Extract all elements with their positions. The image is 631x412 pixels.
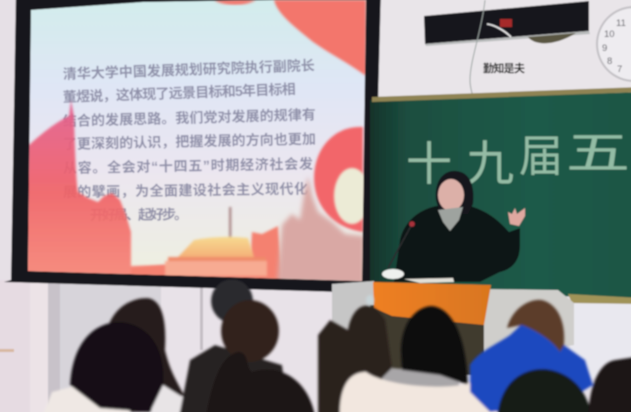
- chalk handwriting: 十: [406, 138, 452, 190]
- speaker striped collar: [438, 207, 463, 231]
- bracket under device: [528, 33, 576, 43]
- student: far right hair: [588, 356, 631, 412]
- student: blue jacket: [470, 322, 593, 412]
- student: black hair centre: [401, 306, 468, 385]
- green chalkboard: [370, 92, 631, 298]
- projector screen frame: [4, 0, 381, 293]
- upper right white wall: [372, 0, 631, 97]
- student: white top shoulder: [150, 380, 184, 412]
- student: white fur hood: [340, 372, 496, 412]
- white cloth on lectern: [382, 269, 404, 279]
- slide body text: 开好局、起好步。: [90, 206, 188, 223]
- student: brown hair long: [100, 298, 184, 412]
- student: white collar far left: [40, 386, 130, 412]
- student: grey collar: [382, 368, 460, 392]
- clock numerals: 9: [602, 43, 607, 54]
- student: bottom right head: [497, 369, 592, 412]
- grey lectern left block: [332, 281, 374, 332]
- right lower wall: [570, 303, 631, 378]
- slide body text: 清华大学中国发展规划研究院执行副院长: [63, 57, 315, 82]
- chalk handwriting: 九: [466, 138, 514, 191]
- chalk handwriting: 五: [566, 129, 630, 178]
- papers on lectern: [404, 278, 454, 283]
- hanging cable: [470, 0, 485, 133]
- student: dark coat center: [178, 345, 290, 412]
- audience: [40, 279, 631, 412]
- chalk handwriting: [406, 129, 630, 191]
- statue group: [277, 176, 364, 285]
- wall clock: [596, 6, 631, 82]
- white cable: [487, 24, 511, 37]
- student: back head top: [211, 279, 253, 323]
- red small arc top: [214, 0, 256, 5]
- microphone: [388, 221, 415, 268]
- dark lectern base: [370, 305, 488, 375]
- student: black hair far left: [70, 322, 163, 412]
- grey lectern right block: [484, 289, 574, 360]
- white circle in ring: [334, 168, 370, 224]
- projected slide: [20, 0, 370, 285]
- calligraphy plaque text: 勤知是夫: [483, 61, 525, 75]
- slide body text: 了更深刻的认识，把握发展的方向也更加: [63, 131, 316, 152]
- orange lectern top: [373, 282, 491, 325]
- speaker: [394, 171, 525, 282]
- clock numerals: 10: [604, 29, 615, 40]
- wall device: black display bar: [424, 1, 590, 46]
- chalk handwriting: 届: [519, 132, 563, 181]
- white hair clip: [366, 295, 374, 305]
- clock numerals: 8: [607, 56, 612, 67]
- student: ponytail front: [205, 352, 316, 412]
- red ring right: [314, 127, 363, 232]
- slide body text: 展的擘画，为全面建设社会主义现代化: [63, 181, 308, 200]
- red skyline strip: [131, 226, 282, 282]
- Tiananmen tower: [165, 207, 267, 276]
- speaker hair: [436, 171, 473, 214]
- student: brown hair right: [507, 300, 564, 352]
- speaker jacket: [394, 206, 520, 282]
- red digital readout: [500, 19, 512, 27]
- student: left of centre dark figure: [318, 306, 392, 412]
- slide body text: 从容。全会对“十四五”时期经济社会发: [63, 156, 313, 176]
- slide body text: [63, 57, 316, 223]
- clock numerals: 11: [616, 18, 626, 29]
- speaker raised hand: [508, 208, 525, 226]
- red left building silhouette: [26, 101, 165, 276]
- clock numerals: [602, 18, 626, 75]
- slide body text: 结合的发展思路。我们党对发展的规律有: [63, 106, 316, 129]
- chalkboard gold frame: [372, 87, 631, 102]
- student: brown hair center: [221, 300, 279, 362]
- slide body text: 董煜说，这体现了远景目标和5年目标相: [63, 81, 296, 105]
- slide background: [20, 0, 370, 285]
- gold chalk ledge: [568, 294, 631, 304]
- lower wall behind audience: [0, 280, 334, 412]
- clock numerals: 7: [617, 64, 622, 75]
- speaker face: [438, 179, 464, 211]
- red corner banner top right: [274, 0, 366, 76]
